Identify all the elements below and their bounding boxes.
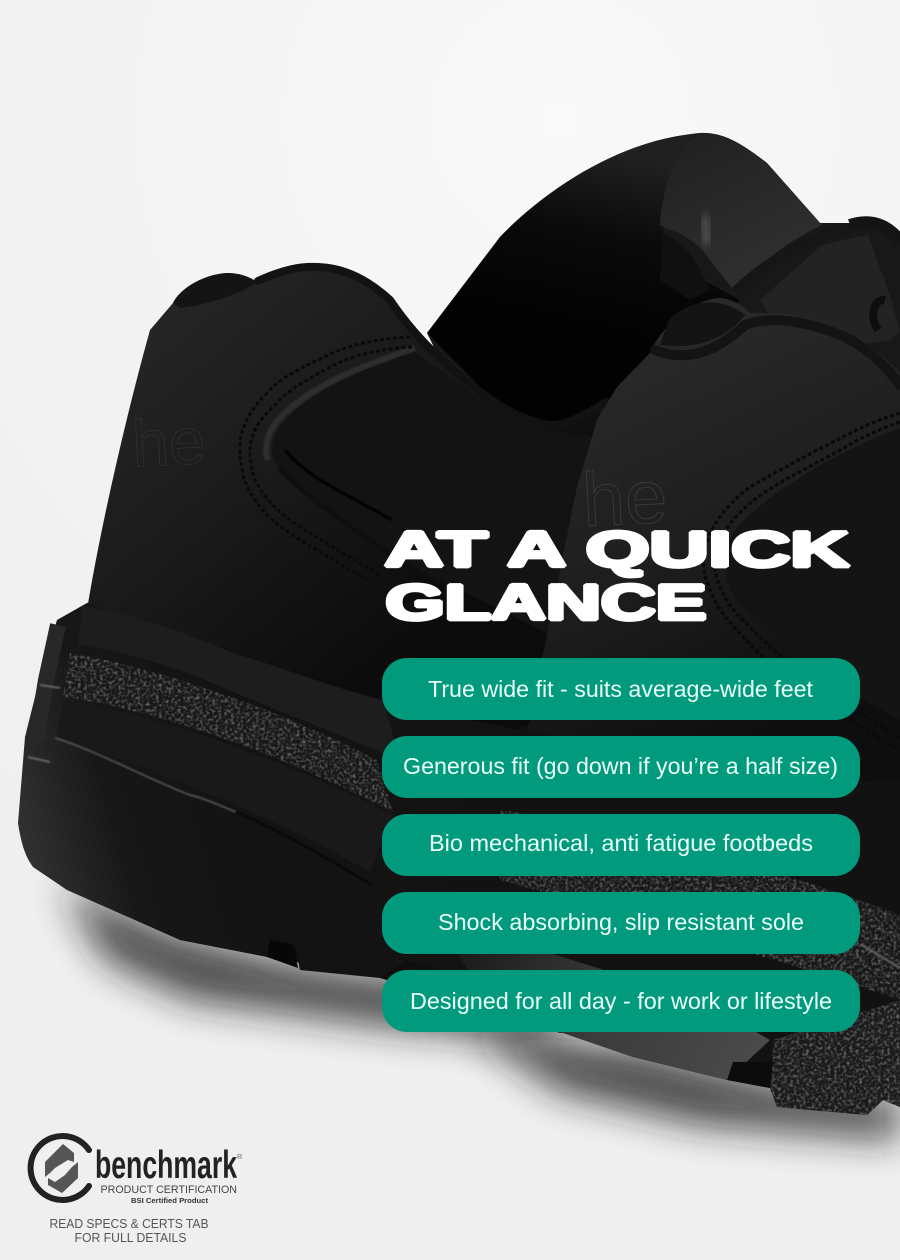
scratch highlight <box>55 738 236 812</box>
cleat notch <box>267 940 298 968</box>
heel collar rope <box>655 320 900 385</box>
side panel <box>725 428 900 720</box>
feature pills <box>382 658 860 1032</box>
stitching <box>703 413 900 750</box>
shoe photo <box>18 133 900 1140</box>
benchmark wordmark: benchmark <box>95 1144 237 1187</box>
stitching <box>240 337 410 580</box>
collar rope <box>258 267 606 425</box>
pill 5 <box>382 970 860 1032</box>
textured band <box>63 653 393 812</box>
pill 3: Bio mechanical, anti fatigue footbeds <box>429 830 813 856</box>
title line 2: GLANCE <box>386 574 706 630</box>
cleat <box>770 1000 900 1115</box>
bsi certified: BSI Certified Product <box>131 1196 208 1205</box>
pill 5: Designed for all day - for work or lifestyle <box>410 988 832 1014</box>
heel ridges <box>36 625 58 740</box>
registered mark: ® <box>237 1153 243 1161</box>
pill 1 <box>382 658 860 720</box>
pill 3 <box>382 814 860 876</box>
pill 4 <box>382 892 860 954</box>
pill 2: Generous fit (go down if you’re a half size) <box>403 753 838 779</box>
note line 1: READ SPECS & CERTS TAB <box>50 1217 208 1231</box>
note line 2: FOR FULL DETAILS <box>74 1231 186 1245</box>
icon: benchmark ring and hexagon <box>31 1136 89 1200</box>
specs note <box>50 1217 208 1245</box>
product certification: PRODUCT CERTIFICATION <box>100 1184 237 1196</box>
logo emboss: he <box>580 454 669 543</box>
left shoe: upper <box>87 265 620 760</box>
pill 1: True wide fit - suits average-wide feet <box>428 676 814 702</box>
textured band <box>500 810 900 1000</box>
curved side panel <box>272 352 610 640</box>
collar padding <box>173 273 257 308</box>
second lip <box>57 700 393 872</box>
dark shoe base <box>87 400 900 1033</box>
pill 2 <box>382 736 860 798</box>
pill 4: Shock absorbing, slip resistant sole <box>438 909 804 935</box>
midsole bump <box>78 606 400 760</box>
right shoe: sole <box>460 810 900 1115</box>
title <box>384 522 850 630</box>
benchmark certification logo <box>31 1136 243 1205</box>
ground shadow: right shoe <box>470 1030 900 1140</box>
ground shadow: left shoe <box>62 885 560 1040</box>
right shoe: upper <box>500 298 900 1000</box>
title line 1: AT A QUICK <box>384 522 850 578</box>
left shoe: sole <box>18 603 394 978</box>
far shoe <box>427 133 900 520</box>
logo emboss: he <box>130 403 207 481</box>
